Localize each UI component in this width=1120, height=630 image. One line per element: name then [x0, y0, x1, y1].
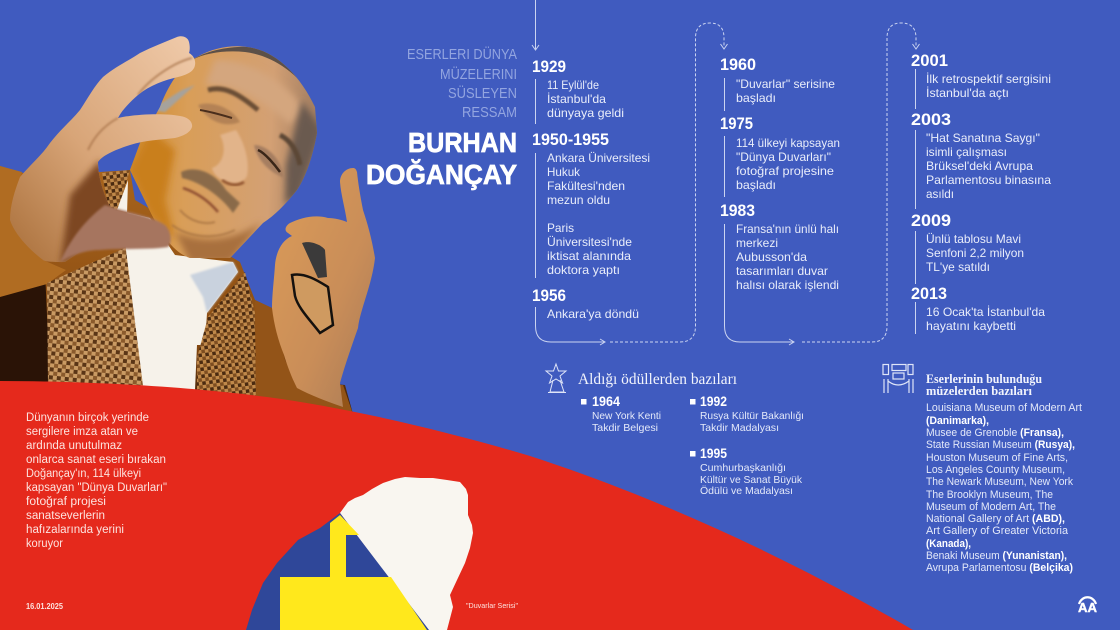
red panel text: Dünyanın birçok yerinde — [26, 412, 149, 424]
title — [366, 127, 517, 190]
text 2003: Parlamentosu binasına — [926, 173, 1051, 187]
year 1975: 1975 — [720, 114, 753, 133]
text 1950-1955: Üniversitesi'nde — [547, 235, 632, 249]
text 1950-1955 — [547, 151, 650, 277]
text 2003: isimli çalışması — [926, 145, 1007, 159]
text 1929: 11 Eylül'de — [547, 78, 599, 92]
red curved panel — [0, 381, 913, 630]
red panel text — [26, 412, 167, 550]
panel: awards — [546, 364, 804, 497]
title: BURHAN — [408, 127, 517, 158]
award 1995: Cumhurbaşkanlığı — [700, 462, 786, 474]
connector arrow to column 3 — [724, 23, 920, 345]
text 1983: merkezi — [736, 236, 778, 250]
year 2003: 2003 — [911, 110, 951, 129]
icon: museum frames — [883, 364, 913, 393]
text 2009: Ünlü tablosu Mavi — [926, 232, 1021, 246]
sleeve right — [255, 300, 353, 414]
year 2001: 2001 — [911, 51, 948, 70]
red panel text: kapsayan "Dünya Duvarları" — [26, 482, 167, 494]
timeline column 3 — [911, 51, 1051, 334]
year 1983: 1983 — [720, 201, 755, 220]
year 2009: 2009 — [911, 211, 951, 230]
glasses — [292, 242, 333, 333]
museums list: (Kanada), — [926, 538, 971, 550]
museums list: National Gallery of Art (ABD), — [926, 513, 1065, 525]
award 1995: Kültür ve Sanat Büyük — [700, 474, 803, 486]
text 1950-1955: mezun oldu — [547, 193, 610, 207]
text 1929: İstanbul'da — [547, 92, 606, 106]
award 1964: New York Kenti — [592, 410, 661, 422]
logo: AA: AA — [1078, 600, 1098, 615]
shirt — [117, 180, 238, 390]
text 1956: Ankara'ya döndü — [547, 307, 639, 321]
award 1964 — [581, 394, 661, 434]
museums heading: Eserlerinin bulunduğu — [926, 372, 1042, 386]
lapel collar — [102, 170, 130, 212]
museums list: Museum of Modern Art, The — [926, 501, 1056, 513]
chin wrinkles — [172, 210, 235, 236]
icon: star trophy — [546, 364, 566, 392]
text 1950-1955: Hukuk — [547, 165, 581, 179]
text 1983 — [736, 222, 839, 292]
text 2001: İlk retrospektif sergisini — [926, 72, 1051, 86]
jacket — [0, 166, 353, 414]
red panel text: sergilere imza atan ve — [26, 426, 138, 438]
text 2003: Brüksel'deki Avrupa — [926, 159, 1033, 173]
torn white paper — [340, 477, 473, 630]
lapel right — [197, 272, 256, 402]
year 1950-1955: 1950-1955 — [532, 130, 609, 149]
yellow shape — [280, 515, 427, 630]
text 1950-1955: Fakültesi'nden — [547, 179, 625, 193]
text 1983: Aubusson'da — [736, 250, 807, 264]
museums list: (Danimarka), — [926, 415, 989, 427]
text 1950-1955: iktisat alanında — [547, 249, 631, 263]
subtitle — [407, 45, 517, 121]
museums list: Musee de Grenoble (Fransa), — [926, 427, 1064, 439]
award 1995: Ödülü ve Madalyası — [700, 485, 793, 497]
subtitle: RESSAM — [462, 104, 517, 121]
award 1992: 1992 — [700, 394, 727, 409]
museums list: The Newark Museum, New York — [926, 476, 1073, 488]
rules — [534, 79, 536, 278]
award 1995 — [690, 446, 803, 497]
moustache — [181, 169, 240, 213]
text 1950-1955: doktora yaptı — [547, 263, 620, 277]
text 2001: İstanbul'da açtı — [926, 86, 1009, 100]
nostril — [222, 180, 244, 185]
text 1975: "Dünya Duvarları" — [736, 150, 831, 164]
red panel text: ardında unutulmaz — [26, 440, 122, 452]
text 1960: başladı — [736, 91, 776, 105]
timeline column 1 — [532, 0, 728, 345]
subtitle: ESERLERI DÜNYA — [407, 45, 517, 63]
panel: museums — [883, 364, 1082, 574]
subtitle: SÜSLEYEN — [448, 84, 517, 102]
thumb — [60, 205, 171, 262]
red panel text: fotoğraf projesi — [26, 496, 106, 508]
subtitle: MÜZELERINI — [440, 65, 517, 83]
red panel text: onlarca sanat eseri bırakan — [26, 454, 166, 466]
year 1956: 1956 — [532, 286, 566, 305]
finger creases — [88, 58, 192, 150]
left sleeve — [0, 166, 66, 297]
right hand — [272, 168, 375, 407]
text 1929: dünyaya geldi — [547, 106, 624, 120]
text 1929 — [547, 78, 624, 120]
museums list — [926, 402, 1082, 574]
text 2009 — [926, 232, 1024, 274]
blue triangle — [246, 513, 429, 630]
photo: portrait of Burhan Doğançay — [0, 36, 375, 414]
head — [130, 46, 317, 258]
text 2003: asıldı — [926, 187, 954, 201]
museums list: Benaki Museum (Yunanistan), — [926, 550, 1067, 562]
jacket shadow — [0, 250, 50, 384]
artwork caption: "Duvarlar Serisi" — [466, 601, 518, 610]
museums list: State Russian Museum (Rusya), — [926, 439, 1075, 451]
text 2009: Senfoni 2,2 milyon — [926, 246, 1024, 260]
text 2003: "Hat Sanatına Saygı" — [926, 131, 1040, 145]
award 1964: Takdir Belgesi — [592, 422, 658, 434]
left hand — [10, 36, 195, 265]
text 2013 — [926, 305, 1045, 333]
eyes — [200, 110, 232, 118]
text 1975: 114 ülkeyi kapsayan — [736, 136, 840, 150]
text 2013: hayatını kaybetti — [926, 319, 1016, 333]
red panel text: hafızalarında yerini — [26, 524, 124, 536]
museums heading — [926, 372, 1042, 398]
year 1929: 1929 — [532, 57, 566, 76]
museums list: The Brooklyn Museum, The — [926, 489, 1053, 501]
red panel text: Doğançay'ın, 114 ülkeyi — [26, 468, 141, 480]
lapel left — [47, 247, 143, 386]
shirt shadow — [190, 262, 238, 313]
nose shading — [212, 130, 248, 183]
text 1983: halısı olarak işlendi — [736, 278, 839, 292]
text 2013: 16 Ocak'ta İstanbul'da — [926, 305, 1045, 319]
text 1960: "Duvarlar" serisine — [736, 77, 835, 91]
mouth — [183, 188, 218, 212]
connector arrow to column 2 — [536, 23, 728, 345]
red panel text: sanatseverlerin — [26, 510, 105, 522]
museums list: Los Angeles County Museum, — [926, 464, 1065, 476]
palm shadow — [60, 160, 116, 265]
award 1992: Rusya Kültür Bakanlığı — [700, 410, 804, 422]
museums list: Art Gallery of Greater Victoria — [926, 525, 1069, 537]
museums list: Houston Museum of Fine Arts, — [926, 452, 1068, 464]
rules — [914, 69, 916, 334]
text 2009: TL'ye satıldı — [926, 260, 990, 274]
year 2013: 2013 — [911, 284, 947, 303]
museums heading: müzelerden bazıları — [926, 384, 1033, 398]
text 1975 — [736, 136, 840, 192]
eyebrows — [208, 89, 258, 110]
title: DOĞANÇAY — [366, 159, 517, 190]
text 2003 — [926, 131, 1051, 201]
year 1960: 1960 — [720, 55, 756, 74]
text 1983: tasarımları duvar — [736, 264, 828, 278]
artwork: Duvarlar Serisi — [246, 477, 473, 630]
date: 16.01.2025 — [26, 601, 63, 611]
text 1975: fotoğraf projesine — [736, 164, 834, 178]
rules — [724, 78, 726, 197]
facial shading and features — [130, 47, 322, 262]
museums list: Avrupa Parlamentosu (Belçika) — [926, 562, 1073, 574]
eye sockets — [198, 104, 240, 124]
text 1950-1955: Paris — [547, 221, 574, 235]
text 1950-1955: Ankara Üniversitesi — [547, 151, 650, 165]
text 1960 — [736, 77, 835, 105]
text 1975: başladı — [736, 178, 776, 192]
award 1964: 1964 — [592, 394, 620, 409]
text 1983: Fransa'nın ünlü halı — [736, 222, 839, 236]
museums list: Louisiana Museum of Modern Art — [926, 402, 1082, 414]
timeline column 2 — [720, 23, 920, 345]
awards heading: Aldığı ödüllerden bazıları — [578, 371, 738, 388]
award 1992 — [690, 394, 804, 434]
award 1992: Takdir Madalyası — [700, 422, 779, 434]
red panel text: koruyor — [26, 538, 63, 550]
award 1995: 1995 — [700, 446, 727, 461]
entry arrow — [532, 0, 539, 50]
text 2001 — [926, 72, 1051, 100]
